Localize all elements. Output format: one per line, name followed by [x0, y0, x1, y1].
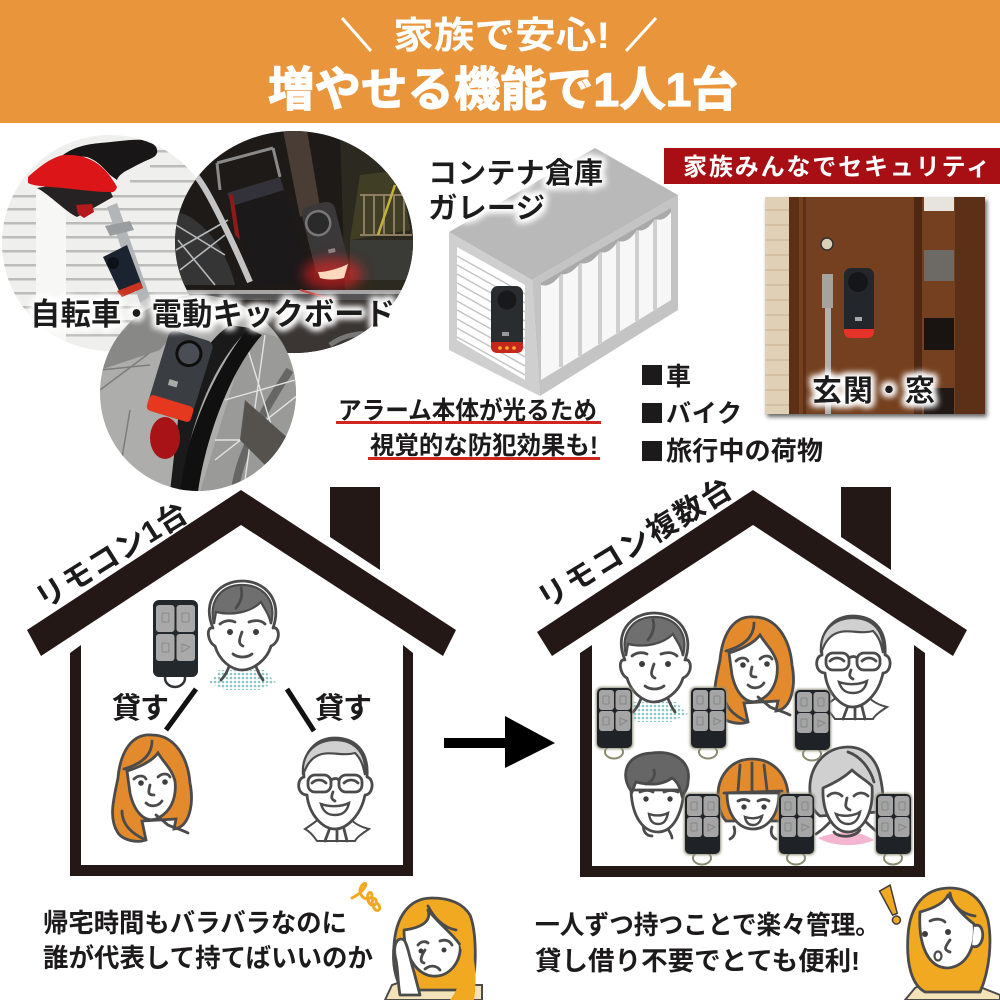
list: other uses	[642, 363, 823, 466]
remote control	[153, 600, 198, 687]
chimney	[841, 487, 891, 570]
header subtitle: 家族で安心!	[393, 15, 610, 56]
person: daughter	[718, 759, 788, 839]
walls	[70, 645, 413, 876]
walls	[580, 645, 925, 877]
house: multiple remotes	[537, 487, 967, 877]
label: bicycle and kickboard: 自転車・電動キックボード	[30, 297, 395, 332]
person: grandfather	[299, 738, 372, 841]
corrugated doors	[541, 208, 671, 380]
remote 3	[794, 689, 831, 760]
container left face	[449, 232, 540, 396]
photo: front door with alarm	[765, 197, 985, 414]
header title: 増やせる機能で1人1台	[268, 63, 738, 116]
red banner: family security: 家族みんなでセキュリティ	[683, 154, 990, 181]
red banner: family security	[664, 148, 1000, 184]
photo: night bike with lit alarm	[175, 131, 413, 353]
person: son	[626, 752, 689, 838]
icon: worry scribble	[352, 884, 380, 911]
text: problem statement	[43, 908, 373, 973]
text: problem statement: 誰が代表して持てばいいのか	[43, 943, 373, 973]
roller shutter	[457, 247, 525, 380]
house: one remote	[27, 487, 456, 876]
person: father	[620, 613, 690, 722]
label: one remote: リモコン1台	[30, 497, 194, 616]
label: multiple remotes: リモコン複数台	[532, 472, 738, 616]
label: entrance and window: 玄関・窓	[812, 375, 935, 408]
remote 1	[596, 687, 633, 758]
callout: visual deterrent: アラーム本体が光るため	[338, 396, 597, 425]
label: lend left: 貸す	[112, 692, 169, 725]
label: container warehouse: コンテナ倉庫	[428, 157, 603, 190]
header slash left	[342, 18, 371, 51]
icon: exclamation mark	[879, 885, 903, 926]
remote 2	[690, 687, 727, 758]
remote 6	[875, 793, 912, 864]
list: other uses: 車	[666, 363, 691, 391]
list: other uses: バイク	[666, 400, 742, 428]
line right	[287, 689, 314, 731]
arrow	[444, 716, 555, 768]
person: surprised woman	[905, 888, 1000, 1000]
container top face	[449, 148, 678, 280]
line left	[166, 689, 196, 730]
illustration: container warehouse	[449, 148, 678, 396]
text: solution statement: 一人ずつ持つことで楽々管理。	[535, 910, 880, 940]
header slash right	[626, 18, 656, 51]
person: mother	[715, 617, 793, 723]
roof	[537, 490, 967, 656]
text: solution statement	[535, 910, 880, 976]
person: grandmother	[810, 747, 883, 845]
label: garage: ガレージ	[428, 192, 545, 225]
photo: bicycle saddle with alarm	[2, 135, 196, 351]
container right face	[532, 195, 678, 396]
callout: visual deterrent: 視覚的な防犯効果も!	[370, 432, 598, 460]
header banner	[0, 0, 1000, 123]
person: grandfather	[817, 616, 890, 719]
person: mother	[113, 735, 191, 841]
family group	[596, 613, 912, 864]
chimney	[330, 487, 380, 570]
roof	[27, 490, 456, 656]
list: other uses: 旅行中の荷物	[666, 436, 823, 466]
text: solution statement: 貸し借り不要でとても便利!	[535, 946, 860, 976]
person: worried woman	[385, 898, 482, 1000]
person: father	[208, 581, 278, 690]
label: lend right: 貸す	[315, 692, 372, 725]
remote 5	[778, 793, 815, 864]
remote 4	[684, 793, 721, 864]
photo: rear fender with alarm	[100, 295, 296, 491]
text: problem statement: 帰宅時間もバラバラなのに	[43, 908, 347, 938]
alarm on shutter	[491, 286, 523, 353]
callout: visual deterrent	[336, 396, 601, 460]
